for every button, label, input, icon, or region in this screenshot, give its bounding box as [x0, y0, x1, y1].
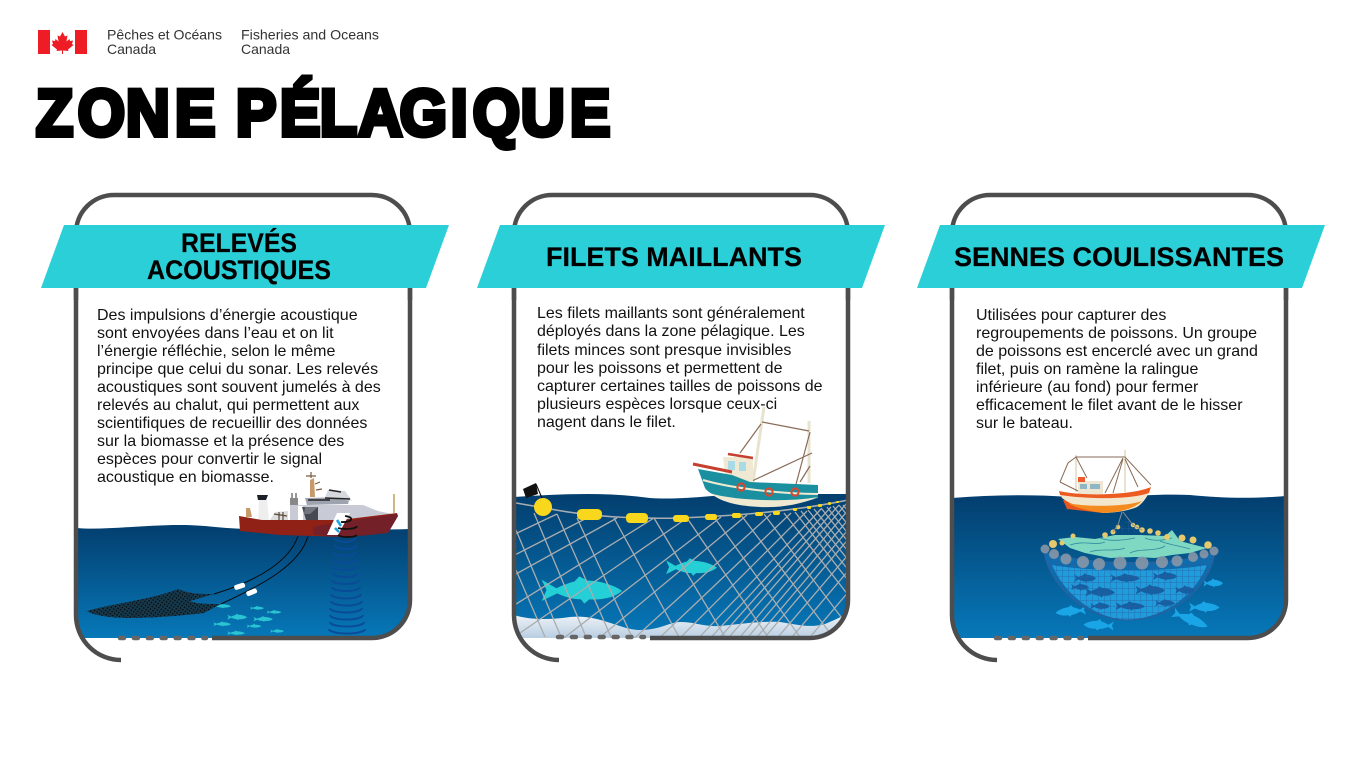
illustration: acoustic survey vessel and trawl	[76, 525, 410, 640]
department name in French: Canada	[107, 41, 156, 57]
water	[76, 525, 410, 640]
yellow floats	[577, 501, 839, 523]
float line	[516, 500, 848, 518]
heading banner: FILETS MAILLANTS	[546, 242, 802, 272]
body text: pour les poissons et permettent de	[537, 360, 783, 377]
seabed	[516, 616, 842, 638]
body text: Utilisées pour capturer des	[976, 307, 1166, 324]
logo: Government of Canada signature	[38, 26, 379, 57]
heading banner: SENNES COULISSANTES	[954, 242, 1284, 272]
department name in French: Pêches et Océans	[107, 26, 222, 42]
body text: efficacement le filet avant de le hisser	[976, 397, 1243, 414]
body text: Les filets maillants sont généralement	[537, 305, 805, 322]
floats	[234, 582, 258, 597]
panel: filets maillants	[477, 192, 885, 662]
panel frame top	[514, 195, 848, 300]
body text: Des impulsions d’énergie acoustique	[97, 307, 358, 324]
body text: nagent dans le filet.	[537, 414, 676, 431]
fish outside net	[1055, 579, 1223, 632]
body text: plusieurs espèces lorsque ceux-ci	[537, 396, 777, 413]
body text: inférieure (au fond) pour fermer	[976, 379, 1199, 396]
panel frame bottom	[514, 285, 559, 660]
body text: sur le bateau.	[976, 415, 1073, 432]
heading banner: ACOUSTIQUES	[147, 255, 331, 285]
body text: sont envoyées dans l’eau et on lit	[97, 325, 334, 342]
body text: sur la biomasse et la présence des	[97, 433, 344, 450]
heading banner	[917, 225, 1325, 288]
department name in English: Canada	[241, 41, 290, 57]
body text: acoustique en biomasse.	[97, 469, 274, 486]
heading banner	[41, 225, 449, 288]
body text: de poissons est encerclé avec un grand	[976, 343, 1258, 360]
body text: regroupements de poissons. Un groupe	[976, 325, 1257, 342]
body text: déployés dans la zone pélagique. Les	[537, 323, 805, 340]
icon: Canadian flag	[38, 30, 87, 54]
water	[952, 495, 1286, 640]
body text: principe que celui du sonar. Les relevés	[97, 361, 378, 378]
net mesh	[516, 504, 846, 638]
sonar waves	[329, 538, 365, 634]
body text: filets minces sont presque invisibles	[537, 342, 791, 359]
ship	[239, 472, 398, 537]
panel frame top	[76, 195, 410, 300]
fish heap	[1058, 530, 1207, 558]
seine boat	[1059, 450, 1151, 513]
fish	[542, 558, 717, 604]
title: ZONE PÉLAGIQUE	[36, 77, 610, 150]
body text: scientifiques de recueillir des données	[97, 415, 367, 432]
department name in English: Fisheries and Oceans	[241, 26, 379, 42]
heading banner: RELEVÉS	[181, 227, 297, 258]
boat lines to net	[1113, 512, 1142, 532]
marker buoy	[523, 483, 552, 516]
panel frame bottom	[952, 285, 997, 660]
illustration: gill net	[516, 494, 846, 638]
body text: relevés au chalut, qui permettent aux	[97, 397, 359, 414]
corkline floats	[1040, 523, 1218, 570]
body text: l’énergie réfléchie, selon le même	[97, 343, 335, 360]
fishing boat	[693, 407, 818, 507]
illustration: purse seine	[952, 495, 1286, 640]
panel frame top	[952, 195, 1286, 300]
school of fish	[213, 604, 284, 635]
purse net	[1044, 520, 1215, 620]
panel: relevés acoustiques	[41, 195, 449, 660]
trawl cables	[214, 536, 308, 604]
panel frame bottom	[76, 285, 121, 660]
body text: acoustiques sont souvent jumelés à des	[97, 379, 381, 396]
heading banner	[477, 225, 885, 288]
body text: filet, puis on ramène la ralingue	[976, 361, 1198, 378]
panel: sennes coulissantes	[917, 195, 1325, 660]
body text: espèces pour convertir le signal	[97, 451, 322, 468]
trawl net	[87, 589, 221, 618]
water	[514, 493, 848, 640]
body text: capturer certaines tailles de poissons de	[537, 378, 823, 395]
